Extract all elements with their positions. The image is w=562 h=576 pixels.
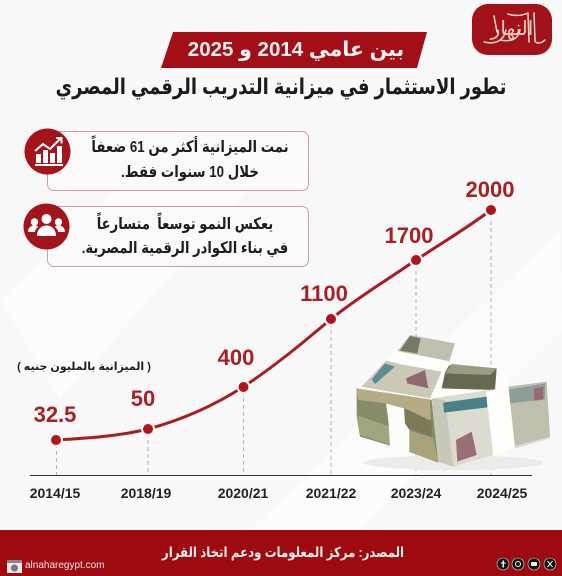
data values [34,177,514,427]
year labels [30,485,527,501]
back bundle [442,365,497,390]
panel: budget growth callout [24,128,309,191]
website: alnaharegypt.com [25,560,104,571]
axis [30,474,532,476]
logo wordmark: النهار [491,18,533,40]
callout text: cadres: يعكس النمو توسعاً متسارعاً [97,216,273,233]
year labels: 2020/21 [218,485,268,501]
data values: 1700 [385,223,433,248]
top bundle [385,335,455,370]
icon: website [7,560,22,573]
data values: 2000 [466,177,514,202]
year labels: 2021/22 [306,485,356,501]
callout text: growth: خلال 10 سنوات فقط. [121,164,259,181]
middle bundle [356,388,431,421]
callout text: growth [91,135,289,181]
data values: 32.5 [34,402,76,427]
drop lines [56,214,491,475]
subtitle banner [161,32,427,68]
year labels: 2023/24 [391,485,441,501]
unit note: ( الميزانية بالمليون جنيه ) [17,361,151,373]
callout text: growth: نمت الميزانية أكثر من 61 ضعفاً [91,139,289,156]
illustration: stacks of banknotes [356,335,550,470]
subtitle text: بين عامي 2014 و 2025 [188,38,404,61]
footer band [0,530,562,576]
callout text: cadres: في بناء الكوادر الرقمية المصرية. [82,240,288,257]
icon: group of people [24,204,70,250]
logo [472,4,552,55]
data values: 50 [131,386,155,411]
year labels: 2024/25 [477,485,527,501]
data values: 1100 [300,281,348,306]
lower stacks [357,390,438,463]
callout text: cadres [82,212,288,257]
source text: المصدر: مركز المعلومات ودعم اتخاذ القرار [162,544,404,560]
social icons [496,558,556,570]
year labels: 2014/15 [30,485,80,501]
icon: rising bar chart [24,128,70,174]
growth curve [56,210,491,440]
data points [50,204,497,446]
data values: 400 [218,345,254,370]
year labels: 2018/19 [121,485,171,501]
title: تطور الاستثمار في ميزانية التدريب الرقمي المصري [56,74,506,99]
front right bundle [432,382,550,467]
panel: digital cadres callout [24,204,309,267]
